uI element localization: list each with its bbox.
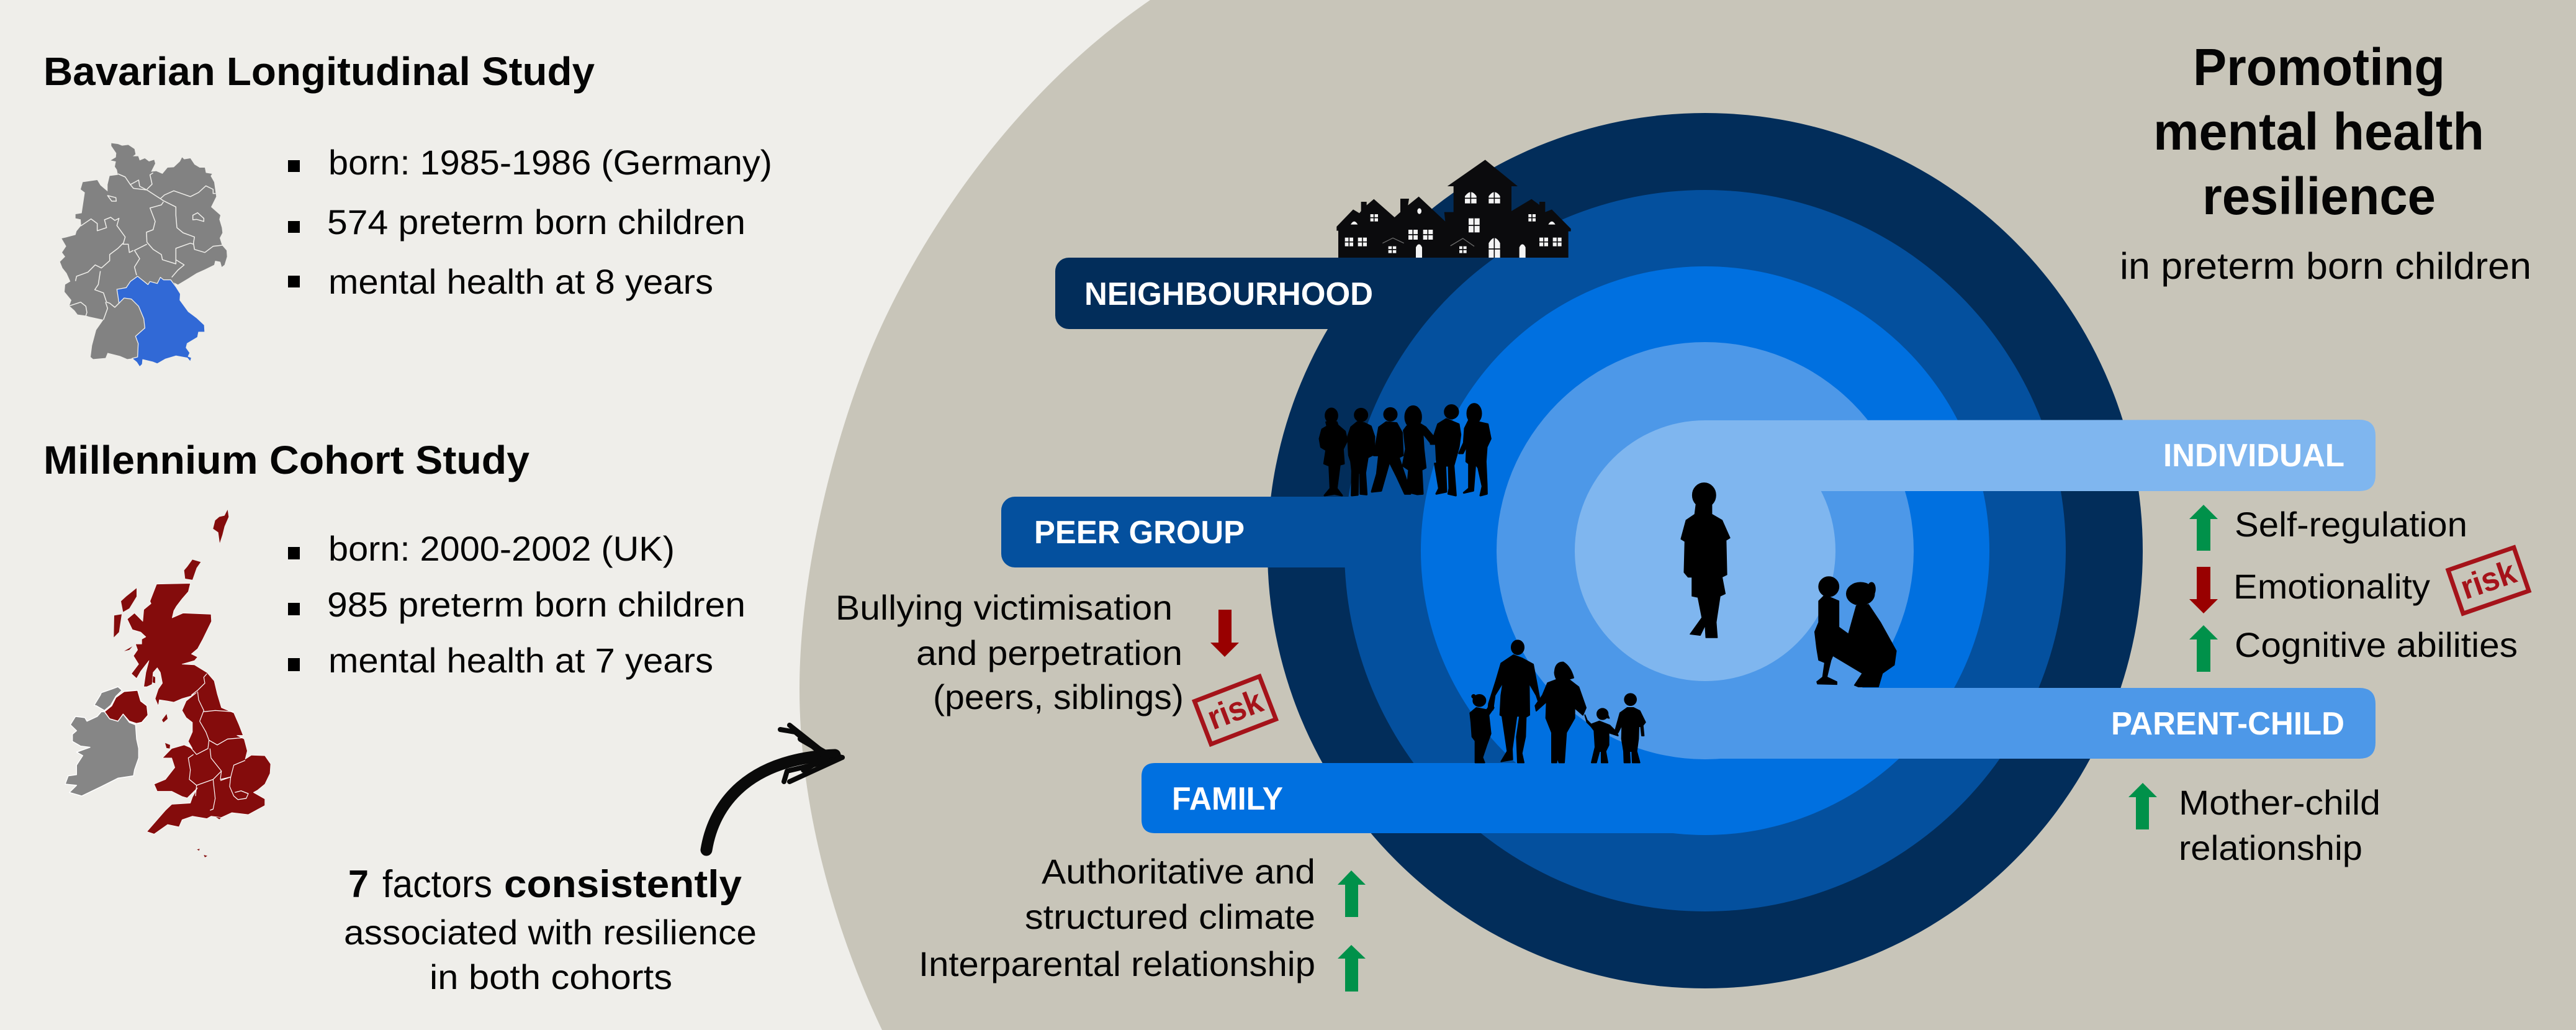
arrow: up, authoritative climate (1338, 870, 1366, 917)
label: FAMILY: FAMILY (1172, 781, 1283, 817)
heading: Bavarian Longitudinal Study: Bavarian Longitudinal Study (43, 49, 595, 94)
bullet list: Bavarian study facts: born: 1985-1986 (Germany) (328, 143, 772, 182)
panel: Millennium Cohort Study (43, 438, 745, 857)
bullet list: Millennium study facts: mental health at 7 years (328, 641, 713, 680)
bar: family (1142, 763, 1705, 833)
map: UK and Ireland (65, 510, 271, 857)
callout: 7 factors consistently associated: consistently (504, 863, 742, 906)
arrow: up, interparental relationship (1338, 945, 1366, 992)
arrow: down, bullying (1210, 610, 1239, 657)
bar: parent-child (1705, 688, 2376, 759)
factors: peer group (835, 588, 1276, 744)
arrow: up, cognitive abilities (2189, 625, 2218, 672)
title: Promoting mental health resilience: resilience (2202, 167, 2436, 225)
heading: Millennium Cohort Study: Millennium Cohort Study (43, 438, 529, 482)
bar: peer group (1001, 497, 1498, 567)
factors: family: Authoritative and (1042, 852, 1315, 891)
subtitle: in preterm born children (2120, 245, 2531, 287)
title: Promoting mental health resilience (2120, 38, 2531, 287)
callout: 7 factors consistently associated: factors (382, 863, 492, 906)
factors: parent-child: Mother-child (2179, 783, 2380, 822)
icon: family silhouette (1470, 640, 1646, 762)
bullet list: Bavarian study facts: 574 preterm born children (327, 202, 745, 242)
factors: individual (2189, 505, 2529, 672)
bullet list: Bavarian study facts (288, 143, 772, 301)
label: PARENT-CHILD: PARENT-CHILD (2111, 706, 2344, 742)
label: INDIVIDUAL: INDIVIDUAL (2163, 438, 2344, 474)
factors: peer group: (peers, siblings) (933, 677, 1184, 716)
icon: houses silhouette (1336, 160, 1571, 258)
factors: parent-child: relationship (2179, 828, 2362, 867)
bar: individual (1705, 420, 2376, 491)
callout: 7 factors consistently associated: associated with resilience (344, 913, 757, 952)
label: PEER GROUP: PEER GROUP (1034, 515, 1245, 551)
factors: peer group: Bullying victimisation (835, 588, 1173, 627)
arrow: down, emotionality (2189, 567, 2218, 613)
arrow: hand-drawn curved arrow (706, 725, 842, 850)
factors: individual: Emotionality (2233, 567, 2430, 606)
icon: peer group of six children (1320, 404, 1490, 495)
factors: individual: Cognitive abilities (2235, 625, 2518, 664)
title: Promoting mental health resilience: mental health (2153, 102, 2484, 161)
chart: concentric socio-ecological rings with level bars (1001, 113, 2376, 988)
icon: standing child silhouette (1681, 483, 1730, 638)
bullet list: Millennium study facts (288, 529, 745, 680)
title: Promoting mental health resilience: Promoting (2193, 38, 2445, 96)
label: NEIGHBOURHOOD: NEIGHBOURHOOD (1084, 276, 1373, 312)
bullet list: Bavarian study facts: mental health at 8 years (328, 262, 713, 301)
icon: parent and child silhouette (1815, 577, 1896, 687)
map: Germany with Bavaria highlighted (60, 143, 227, 367)
panel: Bavarian Longitudinal Study (43, 49, 772, 367)
arrow: up, self-regulation (2189, 505, 2218, 551)
factors: individual: Self-regulation (2235, 505, 2467, 544)
stamp: risk: risk (2456, 553, 2521, 607)
stamp: risk: risk (1202, 682, 1268, 737)
bar: neighbourhood (1055, 258, 1552, 329)
factors: family (919, 852, 1366, 992)
bullet list: Millennium study facts: 985 preterm born children (327, 585, 745, 624)
factors: family: structured climate (1025, 897, 1315, 936)
panel: tan background shape (799, 0, 2576, 1030)
callout: 7 factors consistently associated: in both cohorts (430, 957, 672, 996)
arrow: up, mother-child relationship (2128, 783, 2157, 829)
factors: family: Interparental relationship (919, 944, 1315, 983)
factors: peer group: and perpetration (916, 633, 1182, 672)
callout: 7 factors consistently associated (344, 863, 757, 996)
bullet list: Millennium study facts: born: 2000-2002 (UK) (328, 529, 675, 568)
factors: parent-child (2128, 783, 2380, 867)
callout: 7 factors consistently associated: 7 (348, 863, 369, 906)
